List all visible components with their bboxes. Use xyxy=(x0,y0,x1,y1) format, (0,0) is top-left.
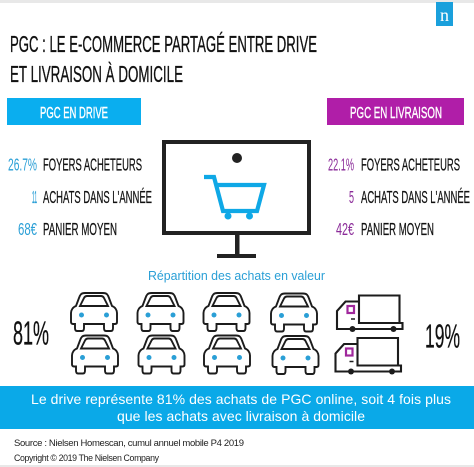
stats: drive: 11 xyxy=(32,187,37,207)
icon: Nielsen logo: n xyxy=(440,5,449,25)
panel heading: PGC en drive xyxy=(7,98,141,125)
copyright: Copyright © 2019 The Nielsen Company xyxy=(14,453,160,463)
stats: livraison xyxy=(328,154,470,239)
pictogram: delivery trucks xyxy=(336,296,402,374)
pictogram: cars xyxy=(71,293,318,374)
icon: Nielsen logo xyxy=(436,2,453,26)
stats: drive: 68€ xyxy=(18,219,37,239)
statistic: 81%: 81% xyxy=(13,314,49,352)
stats: livraison: 22.1% xyxy=(328,154,354,174)
icon: computer monitor with shopping cart xyxy=(164,142,309,258)
subheading: Répartition des achats en valeur xyxy=(148,269,325,283)
stats: drive: 26.7% xyxy=(8,154,37,174)
callout banner: Le drive représente 81% des achats de PGC online, soit 4 fois plus xyxy=(31,391,451,407)
title: ET LIVRAISON À DOMICILE xyxy=(10,61,183,87)
stats: livraison: 5 xyxy=(349,187,354,207)
panel heading: PGC en drive: PGC EN DRIVE xyxy=(40,105,108,122)
stats: drive: PANIER MOYEN xyxy=(43,219,117,239)
panel heading: PGC en livraison xyxy=(327,98,464,125)
stats: drive: ACHATS DANS L'ANNÉE xyxy=(43,187,152,207)
source note: Source : Nielsen Homescan, cumul annuel mobile P4 2019 xyxy=(14,438,244,449)
callout banner xyxy=(0,386,474,429)
stats: livraison: 42€ xyxy=(336,219,354,239)
stats: drive: FOYERS ACHETEURS xyxy=(43,154,142,174)
title xyxy=(10,31,317,87)
callout banner: que les achats avec livraison à domicile xyxy=(117,408,365,424)
stats: drive xyxy=(8,154,152,239)
